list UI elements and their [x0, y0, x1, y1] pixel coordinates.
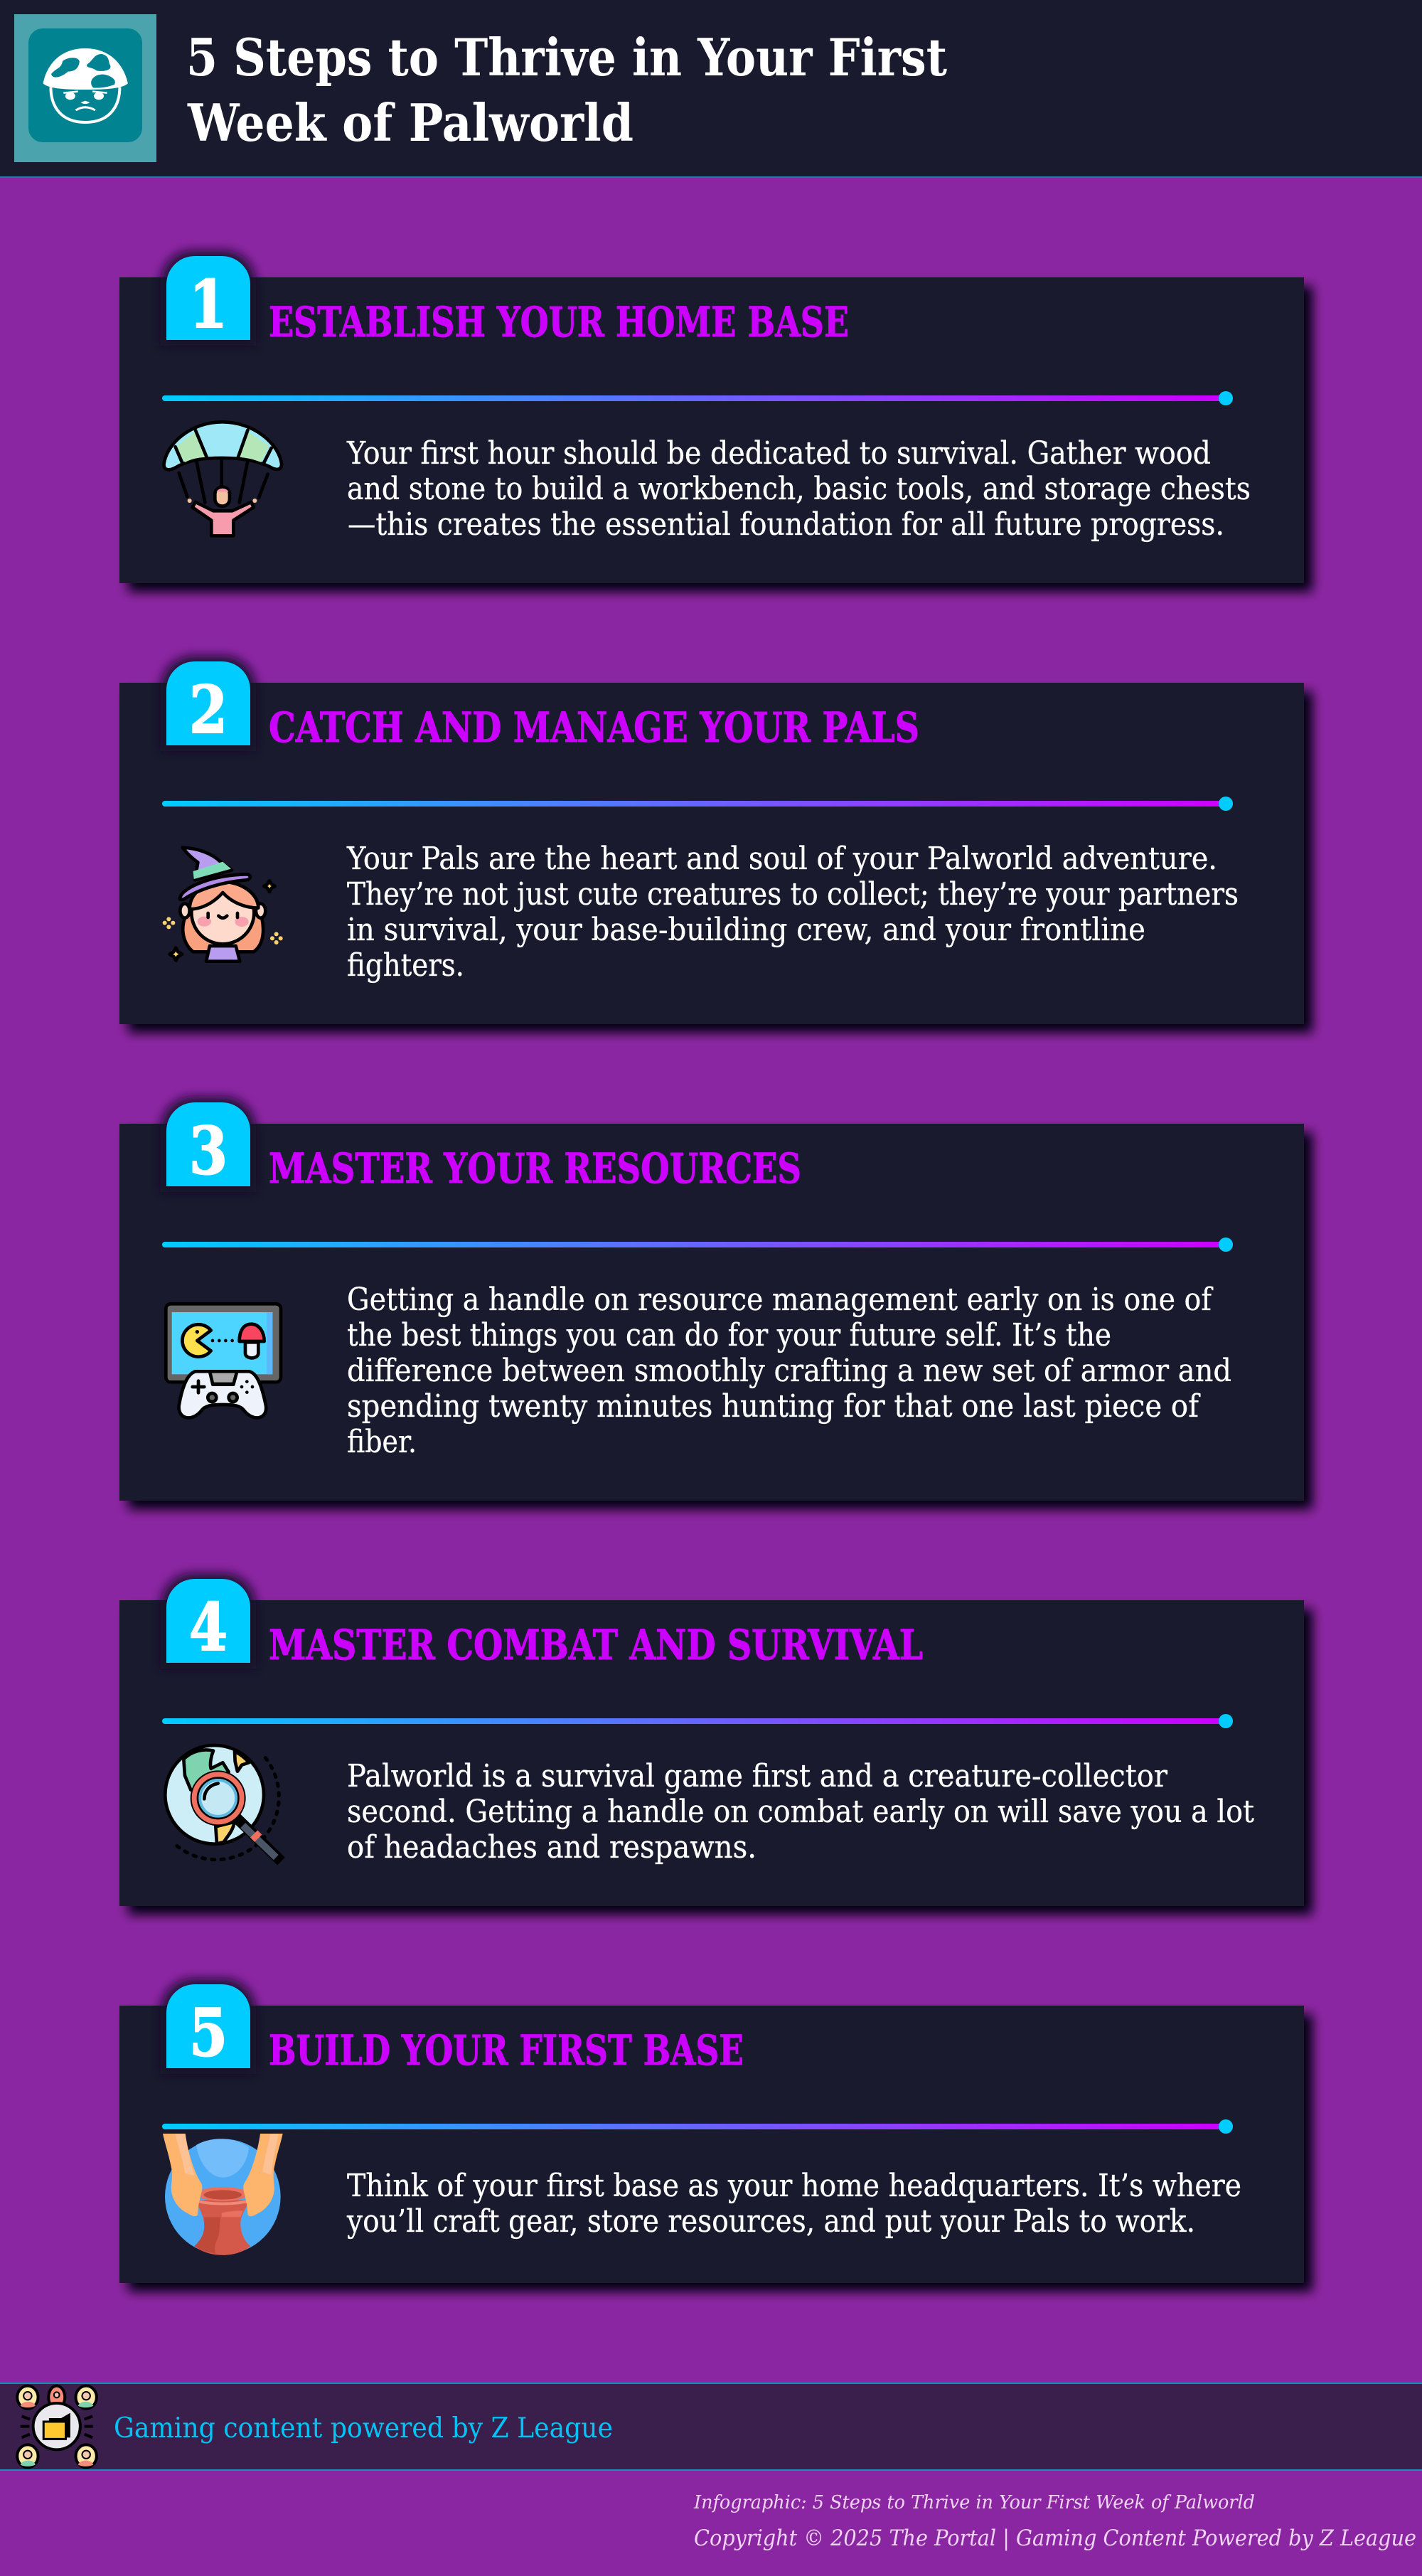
title — [186, 27, 947, 153]
step 1 body text: and stone to build a workbench, basic tools, and storage chests — [347, 471, 1251, 507]
step 2 number badge — [161, 656, 256, 751]
step 2 body text: Your Pals are the heart and soul of your Palworld adventure. — [346, 841, 1217, 877]
step 1 heading: ESTABLISH YOUR HOME BASE — [269, 298, 849, 346]
icon: hands shaping clay pot — [163, 2134, 283, 2255]
step 3 heading: MASTER YOUR RESOURCES — [269, 1144, 801, 1193]
title: Week of Palworld — [187, 92, 634, 153]
step 5 number badge: 5 — [189, 1994, 228, 2071]
step 1 gradient rule — [162, 391, 1233, 405]
step 5 gradient rule — [162, 2119, 1233, 2134]
icon: witch girl — [163, 848, 283, 962]
step 2 gradient rule — [162, 797, 1233, 811]
step 2 body text: They’re not just cute creatures to collect; they’re your partners — [347, 876, 1239, 912]
icon: globe and magnifier — [165, 1745, 279, 1860]
footer bar — [0, 2383, 1422, 2471]
panel: step 4 master combat and survival — [119, 1573, 1313, 1915]
step 2 body text: in survival, your base-building crew, and your frontline — [347, 912, 1145, 948]
step 3 number badge — [161, 1097, 256, 1192]
step 5 body text: Think of your first base as your home headquarters. It’s where — [347, 2168, 1241, 2204]
step 2 heading: CATCH AND MANAGE YOUR PALS — [269, 703, 919, 752]
panel: step 5 build your first base — [119, 1979, 1313, 2292]
credit: infographic title: Infographic: 5 Steps to Thrive in Your First Week of Palworld — [693, 2492, 1255, 2513]
footer tagline: Gaming content powered by Z League — [114, 2412, 613, 2444]
step 3 body text: fiber. — [347, 1424, 417, 1460]
icon: connected people around folder — [17, 2386, 97, 2467]
step 1 body text: —this creates the essential foundation for all future progress. — [348, 506, 1224, 543]
icon: game screen and controller — [166, 1304, 281, 1417]
step 5 heading: BUILD YOUR FIRST BASE — [269, 2026, 744, 2075]
panel: step 3 master your resources — [119, 1097, 1313, 1509]
step 3 body text: spending twenty minutes hunting for that one last piece of — [347, 1388, 1200, 1425]
step 5 body text — [346, 2168, 1241, 2240]
step 5 number badge — [161, 1979, 256, 2074]
step 5 body text: you’ll craft gear, store resources, and put your Pals to work. — [346, 2203, 1195, 2240]
step 3 body text: Getting a handle on resource management early on is one of — [347, 1282, 1213, 1318]
step 2 body text — [346, 841, 1239, 984]
step 4 body text: second. Getting a handle on combat early on will save you a lot — [347, 1794, 1254, 1830]
step 1 number badge — [161, 250, 256, 346]
icon: parachute — [164, 422, 282, 536]
step 2 body text: fighters. — [347, 947, 464, 984]
step 2 number badge: 2 — [189, 671, 228, 748]
step 1 number badge: 1 — [189, 266, 228, 343]
step 1 body text — [346, 435, 1251, 543]
step 4 number badge — [161, 1573, 256, 1668]
step 3 number badge: 3 — [189, 1112, 228, 1189]
step 4 number badge: 4 — [189, 1589, 228, 1666]
step 3 gradient rule — [162, 1238, 1233, 1252]
step 4 body text: Palworld is a survival game first and a creature-collector — [347, 1758, 1168, 1794]
step 4 body text: of headaches and respawns. — [347, 1829, 757, 1866]
step 3 body text — [347, 1282, 1231, 1460]
panel: step 2 catch and manage your pals — [119, 656, 1313, 1033]
step 4 body text — [347, 1758, 1254, 1866]
step 4 heading: MASTER COMBAT AND SURVIVAL — [269, 1621, 923, 1669]
title: 5 Steps to Thrive in Your First — [186, 27, 947, 87]
logo: helmet face — [14, 14, 156, 162]
step 1 body text: Your first hour should be dedicated to survival. Gather wood — [346, 435, 1211, 472]
step 3 body text: the best things you can do for your future self. It’s the — [347, 1317, 1111, 1353]
panel: step 1 establish your home base — [119, 250, 1313, 592]
step 4 gradient rule — [162, 1714, 1233, 1728]
step 3 body text: difference between smoothly crafting a new set of armor and — [347, 1353, 1231, 1389]
header bar — [0, 0, 1422, 178]
